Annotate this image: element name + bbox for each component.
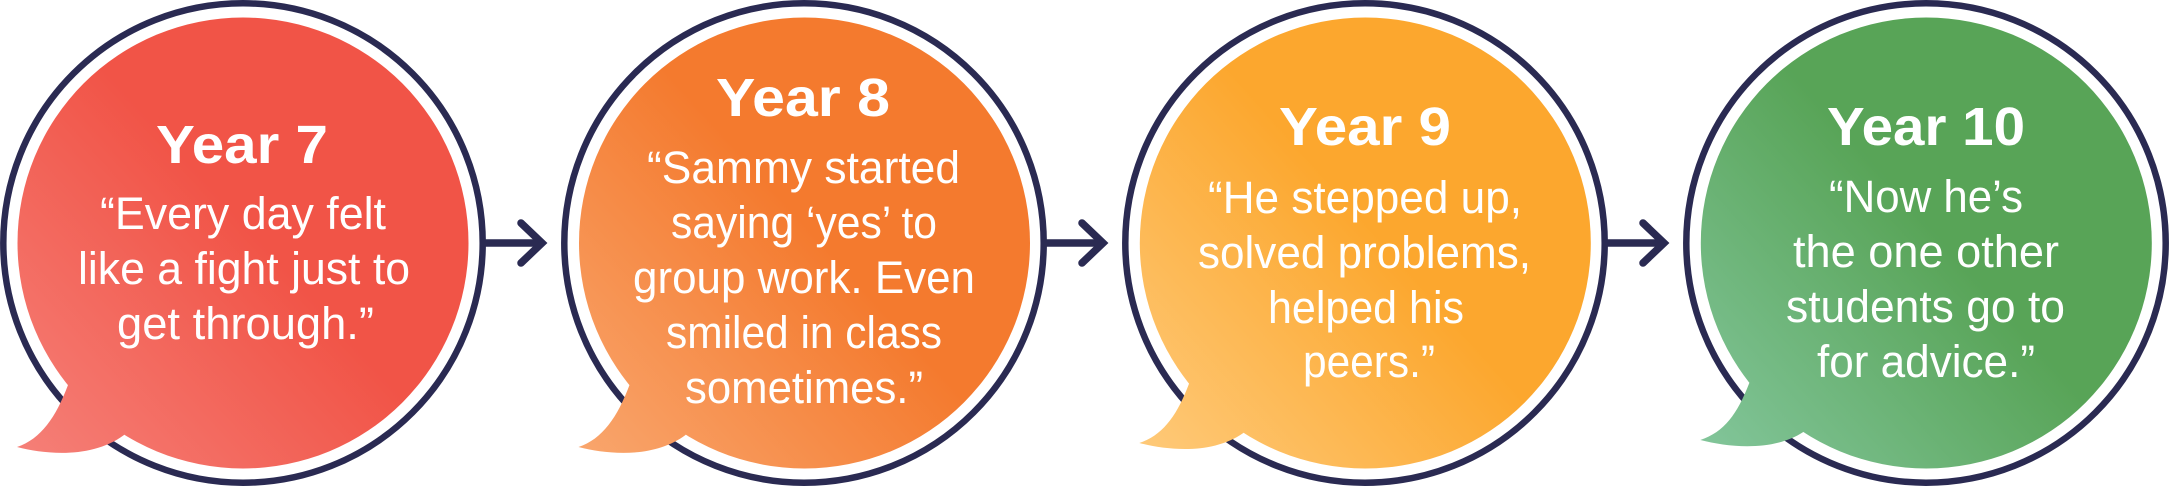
heading: Year 9: Year 9 bbox=[1279, 97, 1451, 157]
panel: Year 10 speech bubble bbox=[1686, 3, 2166, 483]
bubble fill and tail: Year 8 bbox=[578, 18, 1030, 468]
quote: Year 10: “Now he’s bbox=[1829, 171, 2023, 222]
quote: Year 10: for advice.” bbox=[1817, 336, 2035, 387]
quote: Year 8: group work. Even bbox=[633, 252, 975, 303]
quote: Year 7: get through.” bbox=[117, 298, 374, 349]
bubble ring: Year 10 bbox=[1686, 3, 2166, 483]
quote: Year 8: smiled in class bbox=[666, 307, 942, 358]
panel: Year 7 speech bubble bbox=[3, 3, 483, 483]
quote: Year 8 bbox=[633, 142, 975, 413]
quote: Year 10: the one other bbox=[1793, 226, 2059, 277]
bubble fill and tail: Year 7 bbox=[17, 18, 468, 468]
quote: Year 8: “Sammy started bbox=[647, 142, 960, 193]
bubble fill and tail: Year 9 bbox=[1139, 18, 1591, 468]
arrow: Year 9 to Year 10 bbox=[1606, 223, 1664, 263]
quote: Year 9: solved problems, bbox=[1198, 227, 1531, 278]
heading: Year 8: Year 8 bbox=[716, 68, 890, 128]
arrow: Year 8 to Year 9 bbox=[1045, 223, 1103, 263]
quote: Year 9: peers.” bbox=[1303, 336, 1435, 387]
quote: Year 10 bbox=[1786, 171, 2065, 387]
bubble ring: Year 9 bbox=[1125, 3, 1605, 483]
panel: Year 8 speech bubble bbox=[564, 3, 1044, 483]
quote: Year 8: sometimes.” bbox=[685, 362, 923, 413]
bubble fill and tail: Year 10 bbox=[1700, 18, 2152, 468]
quote: Year 7: like a fight just to bbox=[78, 243, 410, 294]
quote: Year 7: “Every day felt bbox=[100, 188, 386, 239]
panel: Year 9 speech bubble bbox=[1125, 3, 1605, 483]
arrow: Year 7 to Year 8 bbox=[484, 223, 542, 263]
quote: Year 10: students go to bbox=[1786, 281, 2065, 332]
heading: Year 7: Year 7 bbox=[156, 115, 328, 175]
quote: Year 9 bbox=[1198, 172, 1531, 387]
heading: Year 10: Year 10 bbox=[1827, 97, 2025, 157]
quote: Year 9: “He stepped up, bbox=[1208, 172, 1522, 223]
quote: Year 8: saying ‘yes’ to bbox=[671, 197, 937, 248]
bubble ring: Year 8 bbox=[564, 3, 1044, 483]
bubble ring: Year 7 bbox=[3, 3, 483, 483]
quote: Year 7 bbox=[78, 188, 410, 349]
quote: Year 9: helped his bbox=[1268, 282, 1464, 333]
